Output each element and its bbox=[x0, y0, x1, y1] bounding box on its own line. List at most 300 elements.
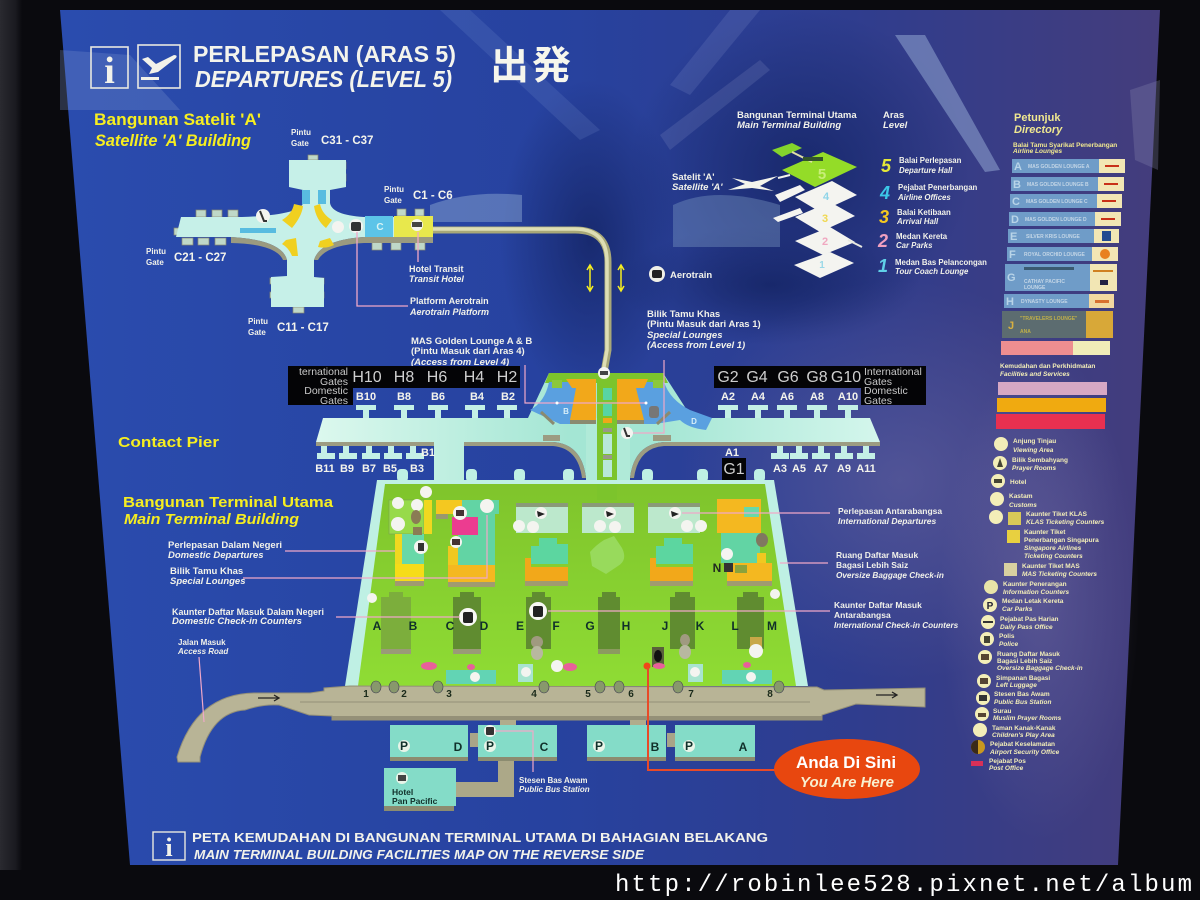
footer note bbox=[153, 830, 768, 862]
access road bbox=[177, 686, 925, 762]
gate labels: pier bbox=[315, 391, 876, 475]
item: customs: Customs bbox=[1009, 502, 1037, 509]
heading: main terminal: Bangunan Terminal Utama bbox=[123, 494, 334, 511]
lounge row E: E bbox=[1010, 231, 1017, 243]
item: information: Kaunter Penerangan bbox=[1003, 581, 1067, 588]
door numbers: 2 bbox=[401, 689, 407, 700]
item: Singapore ticketing: Ticketing Counters bbox=[1024, 553, 1083, 560]
gate labels: pier: B6 bbox=[431, 391, 445, 403]
item: daily pass bbox=[981, 615, 1059, 631]
directory heading: Balai Tamu Syarikat Penerbangan bbox=[1013, 142, 1117, 149]
item: police: Polis bbox=[999, 633, 1015, 640]
item: oversize baggage bbox=[978, 650, 1083, 672]
item: muslim prayer: Surau bbox=[993, 708, 1011, 715]
level 5 entry: Balai Perlepasan bbox=[899, 156, 962, 165]
footer note: MAIN TERMINAL BUILDING FACILITIES MAP ON THE REVERSE SIDE bbox=[194, 847, 644, 862]
panel: G1 bbox=[722, 458, 746, 480]
panel: H gates: H4 bbox=[464, 369, 484, 386]
heading: satellite building: Satellite 'A' Building bbox=[95, 131, 252, 150]
callouts: satellite: Aerotrain Platform bbox=[409, 307, 489, 317]
gate labels: pier: A2 bbox=[721, 391, 735, 403]
gate labels: satellite: Pintu bbox=[248, 317, 268, 326]
callouts: right of terminal: International Check-in Counters bbox=[834, 621, 959, 630]
item: oversize baggage: Oversize Baggage Check-in bbox=[997, 665, 1083, 672]
panel: H gates: Gates bbox=[320, 395, 348, 407]
level stack diagram: 3 bbox=[822, 213, 828, 225]
gate stubs top right bbox=[718, 405, 858, 419]
gate labels: pier: B11 bbox=[315, 463, 335, 475]
panel: H gates: ternational bbox=[299, 366, 348, 378]
level 4 entry: Pejabat Penerbangan bbox=[898, 183, 978, 192]
item: oversize baggage: Ruang Daftar Masuk bbox=[997, 651, 1060, 658]
panel: G gates: International bbox=[864, 366, 922, 378]
lounge row J: J bbox=[1008, 320, 1014, 332]
you are here marker: Anda Di Sini bbox=[796, 753, 896, 772]
item: play area: Taman Kanak-Kanak bbox=[992, 725, 1056, 732]
gate labels: pier: B8 bbox=[397, 391, 411, 403]
lounge row D: D bbox=[1011, 214, 1019, 226]
panel: G gates: G8 bbox=[806, 369, 828, 386]
callouts: right of terminal: Antarabangsa bbox=[834, 610, 891, 620]
item: daily pass: Daily Pass Office bbox=[1000, 624, 1053, 631]
car park D bbox=[390, 725, 468, 761]
you are here marker bbox=[644, 662, 920, 799]
item: Singapore ticketing: Singapore Airlines bbox=[1024, 545, 1082, 552]
panel: G gates: G4 bbox=[746, 369, 768, 386]
icon: departing plane bbox=[138, 45, 180, 88]
panel: H gates: H2 bbox=[497, 369, 517, 386]
level 1 entry: Tour Coach Lounge bbox=[895, 267, 969, 276]
item: left luggage: Left Luggage bbox=[996, 682, 1037, 689]
lounge row H bbox=[1004, 294, 1114, 308]
callouts: lounges: (Access from Level 1) bbox=[647, 340, 745, 351]
block: lower left centre bbox=[525, 538, 568, 586]
car park C bbox=[478, 725, 557, 761]
block: lower right centre bbox=[650, 538, 693, 586]
car park B: P bbox=[595, 739, 603, 753]
heading: main terminal: Main Terminal Building bbox=[124, 512, 299, 528]
level 4 entry bbox=[879, 183, 978, 203]
gate labels: satellite: C21 - C27 bbox=[174, 252, 226, 264]
panel: G gates: Gates bbox=[864, 395, 892, 407]
check-in letters: D bbox=[480, 619, 489, 633]
callouts: right of terminal: Ruang Daftar Masuk bbox=[836, 550, 918, 560]
lounge leader lines bbox=[525, 360, 664, 433]
gate labels: satellite: Pintu bbox=[384, 185, 404, 194]
item: car parks: Car Parks bbox=[1002, 606, 1033, 613]
directory: facilities and services bbox=[996, 363, 1107, 429]
car park A: A bbox=[739, 740, 748, 754]
gate stubs bbox=[174, 155, 425, 313]
directory heading: Airline Lounges bbox=[1012, 148, 1062, 155]
callouts: right of terminal: Perlepasan Antarabangsa bbox=[838, 506, 942, 516]
item: muslim prayer bbox=[975, 707, 1062, 722]
contact pier plan: D bbox=[691, 417, 697, 426]
gate labels: pier: A4 bbox=[751, 391, 766, 403]
car park D: D bbox=[454, 740, 463, 754]
legend swatch: services bbox=[996, 414, 1105, 429]
callouts: left of terminal: Jalan Masuk bbox=[178, 638, 226, 647]
door numbers: 3 bbox=[446, 689, 452, 700]
kerbside pavilions bbox=[446, 664, 772, 684]
panel: G gates: G2 bbox=[717, 369, 739, 386]
hub green band bbox=[545, 373, 668, 383]
level 1 entry: 1 bbox=[878, 256, 888, 276]
check-in islands bbox=[381, 592, 764, 654]
item: security: Pejabat Keselamatan bbox=[990, 741, 1055, 748]
lounge row B: B bbox=[1013, 179, 1021, 191]
item: prayer rooms bbox=[993, 456, 1068, 472]
item: customs: Kastam bbox=[1009, 493, 1033, 500]
callouts: right of terminal: Oversize Baggage Check-in bbox=[836, 571, 944, 580]
level stack diagram: 4 bbox=[823, 191, 830, 203]
small satellite plan bbox=[728, 176, 778, 191]
lounge row D: MAS GOLDEN LOUNGE D bbox=[1025, 217, 1087, 223]
level 5 entry bbox=[881, 156, 962, 176]
satellite A building plan: C bbox=[376, 222, 384, 233]
heading: satellite building bbox=[94, 110, 261, 150]
item: prayer rooms: Bilik Sembahyang bbox=[1012, 457, 1068, 464]
callouts: satellite: Platform Aerotrain bbox=[410, 296, 489, 306]
item: viewing area bbox=[994, 437, 1056, 454]
callouts: lounges: MAS Golden Lounge A & B bbox=[411, 336, 532, 347]
leader lines bbox=[357, 232, 418, 306]
callouts: satellite: Hotel Transit bbox=[409, 264, 464, 274]
directory: facilities and services: Facilities and Services bbox=[1000, 371, 1070, 378]
check-in letters bbox=[373, 561, 777, 633]
gate labels: pier: B9 bbox=[340, 463, 354, 475]
level 4 entry: 4 bbox=[879, 183, 890, 203]
level 5 entry: 5 bbox=[881, 156, 892, 176]
hub: left lounge blue bbox=[530, 382, 596, 424]
walkway links bbox=[500, 720, 516, 732]
panel: G gates: Gates bbox=[864, 376, 892, 388]
lounge row G: CATHAY PACIFIC bbox=[1024, 279, 1065, 285]
pier body bbox=[316, 373, 880, 482]
leader lines bbox=[243, 513, 830, 617]
item: MAS ticketing: Kaunter Tiket MAS bbox=[1022, 563, 1080, 570]
door numbers bbox=[363, 689, 773, 700]
panel: G gates: Domestic bbox=[864, 385, 908, 397]
gate labels: satellite: Gate bbox=[146, 258, 164, 267]
check-in letters: B bbox=[409, 619, 418, 633]
photo watermark: http://robinlee528.pixnet.net/album bbox=[615, 872, 1192, 899]
lounge row H: H bbox=[1006, 296, 1014, 308]
callouts: lounges bbox=[411, 309, 761, 368]
item: post office: Post Office bbox=[989, 765, 1024, 772]
item: information: Information Counters bbox=[1003, 589, 1069, 596]
item: car parks bbox=[983, 598, 1064, 613]
gate labels: satellite: Gate bbox=[384, 196, 402, 205]
item: Singapore ticketing bbox=[1007, 529, 1099, 560]
hub: right lounge blue bbox=[617, 382, 712, 430]
contact pier plan: B bbox=[563, 407, 569, 416]
check-in letters: E bbox=[516, 619, 524, 633]
you are here marker: You Are Here bbox=[800, 774, 894, 791]
callouts: satellite: Transit Hotel bbox=[409, 274, 464, 284]
hotel pan pacific: Hotel bbox=[392, 787, 413, 797]
callouts: lounges: (Pintu Masuk dari Aras 1) bbox=[647, 319, 761, 330]
lounge row J bbox=[1002, 311, 1113, 338]
caption: main terminal: Bangunan Terminal Utama bbox=[737, 110, 857, 121]
caption: main terminal bbox=[737, 110, 857, 131]
bus icon and leader bbox=[484, 725, 533, 772]
check-in letters: H bbox=[622, 619, 630, 633]
cross-shaped concourse bbox=[176, 160, 433, 307]
panel: G gates bbox=[714, 366, 926, 407]
item: hotel: Hotel bbox=[1010, 479, 1026, 486]
item: viewing area: Anjung Tinjau bbox=[1013, 438, 1056, 445]
caption: satellite: Satellite 'A' bbox=[672, 182, 723, 193]
callouts: left of terminal: Domestic Check-in Counters bbox=[172, 616, 302, 627]
gate labels: satellite: Pintu bbox=[291, 128, 311, 137]
level 4 bbox=[795, 181, 857, 212]
door numbers: 7 bbox=[688, 689, 694, 700]
gate labels: satellite: Pintu bbox=[146, 247, 166, 256]
callouts: right of terminal: Bagasi Lebih Saiz bbox=[836, 560, 908, 570]
block: domestic second bbox=[436, 500, 499, 587]
level 3 entry: Arrival Hall bbox=[896, 217, 939, 226]
callouts: left of terminal: Perlepasan Dalam Negeri bbox=[168, 540, 282, 551]
caption: satellite: Satelit 'A' bbox=[672, 172, 715, 183]
lounge row E: SILVER KRIS LOUNGE bbox=[1026, 234, 1080, 240]
block: international right bbox=[717, 499, 772, 586]
callouts: right of terminal bbox=[834, 506, 959, 630]
terminal floor green bbox=[358, 484, 796, 686]
level 2 entry bbox=[877, 231, 948, 251]
item: left luggage bbox=[977, 674, 1050, 689]
item: security: Airport Security Office bbox=[989, 749, 1060, 756]
gate labels: pier: A10 bbox=[838, 391, 858, 403]
check-in letters: M bbox=[767, 619, 777, 633]
C zone bbox=[365, 216, 393, 237]
panel: G gates: G6 bbox=[777, 369, 799, 386]
centre garden bbox=[590, 536, 624, 574]
callouts: right of terminal: Kaunter Daftar Masuk bbox=[834, 600, 922, 610]
gate labels: pier: B5 bbox=[383, 463, 397, 475]
door numbers: 5 bbox=[585, 689, 591, 700]
gate labels: pier: B4 bbox=[470, 391, 485, 403]
gate labels: pier: A6 bbox=[780, 391, 794, 403]
check-in letters: J bbox=[662, 619, 668, 633]
directory: facilities and services: Kemudahan dan Perkhidmatan bbox=[1000, 363, 1095, 370]
lounge row C bbox=[1010, 194, 1122, 208]
panel: H gates: H10 bbox=[352, 369, 382, 386]
caption: satellite bbox=[672, 172, 723, 193]
gate stubs bottom bbox=[317, 445, 875, 459]
gate labels: satellite: C31 - C37 bbox=[321, 135, 373, 147]
lounge row B: MAS GOLDEN LOUNGE B bbox=[1027, 182, 1089, 188]
car park A: P bbox=[685, 739, 693, 753]
gate labels: pier: A11 bbox=[856, 463, 876, 475]
level 3 entry: Balai Ketibaan bbox=[897, 208, 951, 217]
gate labels: pier: A1 bbox=[725, 447, 739, 459]
car park B: B bbox=[651, 740, 660, 754]
lounge row J: ANA bbox=[1020, 329, 1031, 335]
directory heading: Petunjuk bbox=[1014, 112, 1061, 124]
level 1 entry bbox=[878, 256, 987, 276]
hotel pan pacific bbox=[384, 768, 456, 811]
gate labels: pier: A9 bbox=[837, 463, 851, 475]
car park C: P bbox=[486, 739, 494, 753]
callouts: right of terminal: International Departures bbox=[838, 516, 937, 526]
gate labels: pier: A8 bbox=[810, 391, 824, 403]
gate labels: satellite: C1 - C6 bbox=[413, 190, 453, 202]
callouts: left of terminal: Kaunter Daftar Masuk Dalam Negeri bbox=[172, 607, 324, 618]
rail link to main terminal bbox=[432, 230, 608, 378]
block: piers upper teal bbox=[516, 507, 700, 533]
item: MAS ticketing bbox=[1004, 563, 1097, 578]
level stack diagram: 1 bbox=[819, 260, 825, 271]
level legend: Level bbox=[883, 120, 908, 131]
block: domestic left bbox=[389, 500, 432, 586]
item: information bbox=[984, 580, 1069, 596]
door numbers: 8 bbox=[767, 689, 773, 700]
lounge row G: LOUNGE bbox=[1024, 285, 1046, 291]
item: play area: Children's Play Area bbox=[992, 732, 1055, 739]
item: play area bbox=[973, 723, 1056, 739]
lounge row F: F bbox=[1009, 249, 1016, 261]
check-in letters: K bbox=[696, 619, 705, 633]
level 2 entry: Car Parks bbox=[896, 241, 933, 250]
gate labels: pier: A5 bbox=[792, 463, 806, 475]
footer note: PETA KEMUDAHAN DI BANGUNAN TERMINAL UTAMA DI BAHAGIAN BELAKANG bbox=[192, 830, 768, 845]
level stack diagram: 5 bbox=[818, 166, 826, 183]
lounge row G bbox=[1005, 264, 1117, 291]
item: Singapore ticketing: Penerbangan Singapura bbox=[1024, 537, 1099, 544]
contact pier plan bbox=[316, 360, 880, 483]
check-in letters: F bbox=[552, 619, 560, 633]
item: muslim prayer: Muslim Prayer Rooms bbox=[993, 715, 1062, 722]
lounge row F bbox=[1007, 247, 1118, 261]
callouts: lounges: (Access from Level 4) bbox=[411, 357, 509, 368]
level stack diagram: 2 bbox=[822, 236, 828, 248]
panel: H gates bbox=[288, 366, 520, 407]
level 2 entry: Medan Kereta bbox=[896, 232, 948, 241]
callouts: left of terminal: Access Road bbox=[177, 647, 229, 656]
level legend: Aras bbox=[883, 110, 904, 121]
gate labels: pier: B1 bbox=[421, 447, 435, 459]
legend swatch: lounges bbox=[998, 382, 1107, 395]
panel: H gates: Domestic bbox=[304, 385, 348, 397]
callouts: left of terminal: Special Lounges bbox=[170, 576, 246, 587]
lounge row C: C bbox=[1012, 196, 1020, 208]
lounge row B bbox=[1011, 177, 1124, 191]
title block bbox=[91, 41, 571, 92]
heading: main terminal bbox=[123, 494, 334, 528]
legend swatch: restaurants bbox=[997, 398, 1106, 412]
terminal icons bbox=[367, 486, 780, 672]
satellite A building plan bbox=[174, 155, 608, 378]
directory heading: Directory bbox=[1014, 124, 1063, 136]
item: car parks: Medan Letak Kereta bbox=[1002, 598, 1064, 605]
level 2 bbox=[795, 227, 855, 255]
car park A bbox=[675, 725, 755, 761]
directory: airline lounges bbox=[1001, 112, 1125, 355]
car park D: P bbox=[400, 739, 408, 753]
heading: departures: PERLEPASAN (ARAS 5) bbox=[193, 41, 456, 67]
aerotrain arrows and icon: Aerotrain bbox=[670, 270, 712, 281]
heading: departures bbox=[193, 41, 456, 92]
panel: G1: G1 bbox=[723, 461, 745, 478]
level 5 entry: Departure Hall bbox=[899, 166, 953, 175]
door numbers: 4 bbox=[531, 689, 537, 700]
callouts: satellite bbox=[409, 264, 489, 317]
car park B bbox=[587, 725, 666, 761]
level 4 entry: Airline Offices bbox=[897, 193, 951, 202]
item: KLAS ticketing bbox=[989, 510, 1105, 526]
level 3 entry: 3 bbox=[879, 207, 889, 227]
gate labels: satellite: C11 - C17 bbox=[277, 322, 329, 334]
check-in letters: N bbox=[713, 561, 721, 575]
item: Singapore ticketing: Kaunter Tiket bbox=[1024, 529, 1066, 536]
check-in letters: G bbox=[585, 619, 595, 633]
item: hotel bbox=[991, 474, 1026, 488]
hub: orange shops bbox=[566, 379, 596, 420]
pink services bbox=[421, 662, 751, 671]
black gate panels bbox=[288, 366, 926, 480]
level 1 entry: Medan Bas Pelancongan bbox=[895, 258, 987, 267]
panel: H gates: H8 bbox=[394, 369, 414, 386]
door numbers: 6 bbox=[628, 689, 634, 700]
icon: information: i bbox=[104, 50, 115, 92]
lounge row C: MAS GOLDEN LOUNGE C bbox=[1026, 199, 1088, 205]
central walkway teal bbox=[586, 418, 630, 480]
top stubs bbox=[397, 469, 765, 482]
gate labels: pier: B3 bbox=[410, 463, 424, 475]
caption: main terminal: Main Terminal Building bbox=[737, 120, 841, 131]
gate labels: satellite bbox=[146, 128, 453, 337]
callout: bus station: Stesen Bas Awam bbox=[519, 776, 587, 785]
item: oversize baggage: Bagasi Lebih Saiz bbox=[997, 658, 1053, 665]
callouts: left of terminal: Domestic Departures bbox=[168, 550, 264, 561]
heading: Japanese departures: 出発 bbox=[490, 45, 571, 88]
lounge row bottom bbox=[1001, 341, 1110, 355]
lounge row G: G bbox=[1007, 272, 1016, 284]
level 3 bbox=[795, 202, 855, 232]
panel: G gates: G10 bbox=[831, 369, 861, 386]
gate labels: satellite: Gate bbox=[248, 328, 266, 337]
gate labels: satellite: Gate bbox=[291, 139, 309, 148]
yellow transit hotel zone bbox=[394, 216, 433, 237]
item: KLAS ticketing: Kaunter Tiket KLAS bbox=[1026, 511, 1088, 518]
item: police: Police bbox=[999, 641, 1019, 648]
level 3 entry bbox=[879, 207, 951, 227]
lounge row A: MAS GOLDEN LOUNGE A bbox=[1028, 164, 1090, 170]
aerotrain arrows and icon bbox=[587, 265, 712, 291]
hotel pan pacific: Pan Pacific bbox=[392, 796, 438, 806]
item: public bus bbox=[976, 691, 1051, 706]
terminal outer teal bbox=[345, 480, 808, 686]
level legend bbox=[877, 110, 987, 276]
main terminal building plan bbox=[243, 469, 830, 686]
icon: information: i bbox=[165, 833, 173, 862]
item: viewing area: Viewing Area bbox=[1013, 447, 1054, 454]
item: police bbox=[980, 632, 1019, 648]
lounge row F: ROYAL ORCHID LOUNGE bbox=[1024, 252, 1086, 258]
check-in letters: C bbox=[446, 619, 455, 633]
lounge row A: A bbox=[1014, 161, 1022, 173]
item: KLAS ticketing: KLAS Ticketing Counters bbox=[1026, 519, 1105, 526]
car park C: C bbox=[540, 740, 549, 754]
satellite icons bbox=[256, 209, 423, 233]
gate labels: pier: A7 bbox=[814, 463, 828, 475]
callout: bus station bbox=[519, 776, 590, 794]
road and parking plan bbox=[177, 681, 925, 811]
level 5 bbox=[772, 143, 802, 157]
gate labels: pier: A3 bbox=[773, 463, 787, 475]
heading: satellite building: Bangunan Satelit 'A' bbox=[94, 110, 261, 129]
